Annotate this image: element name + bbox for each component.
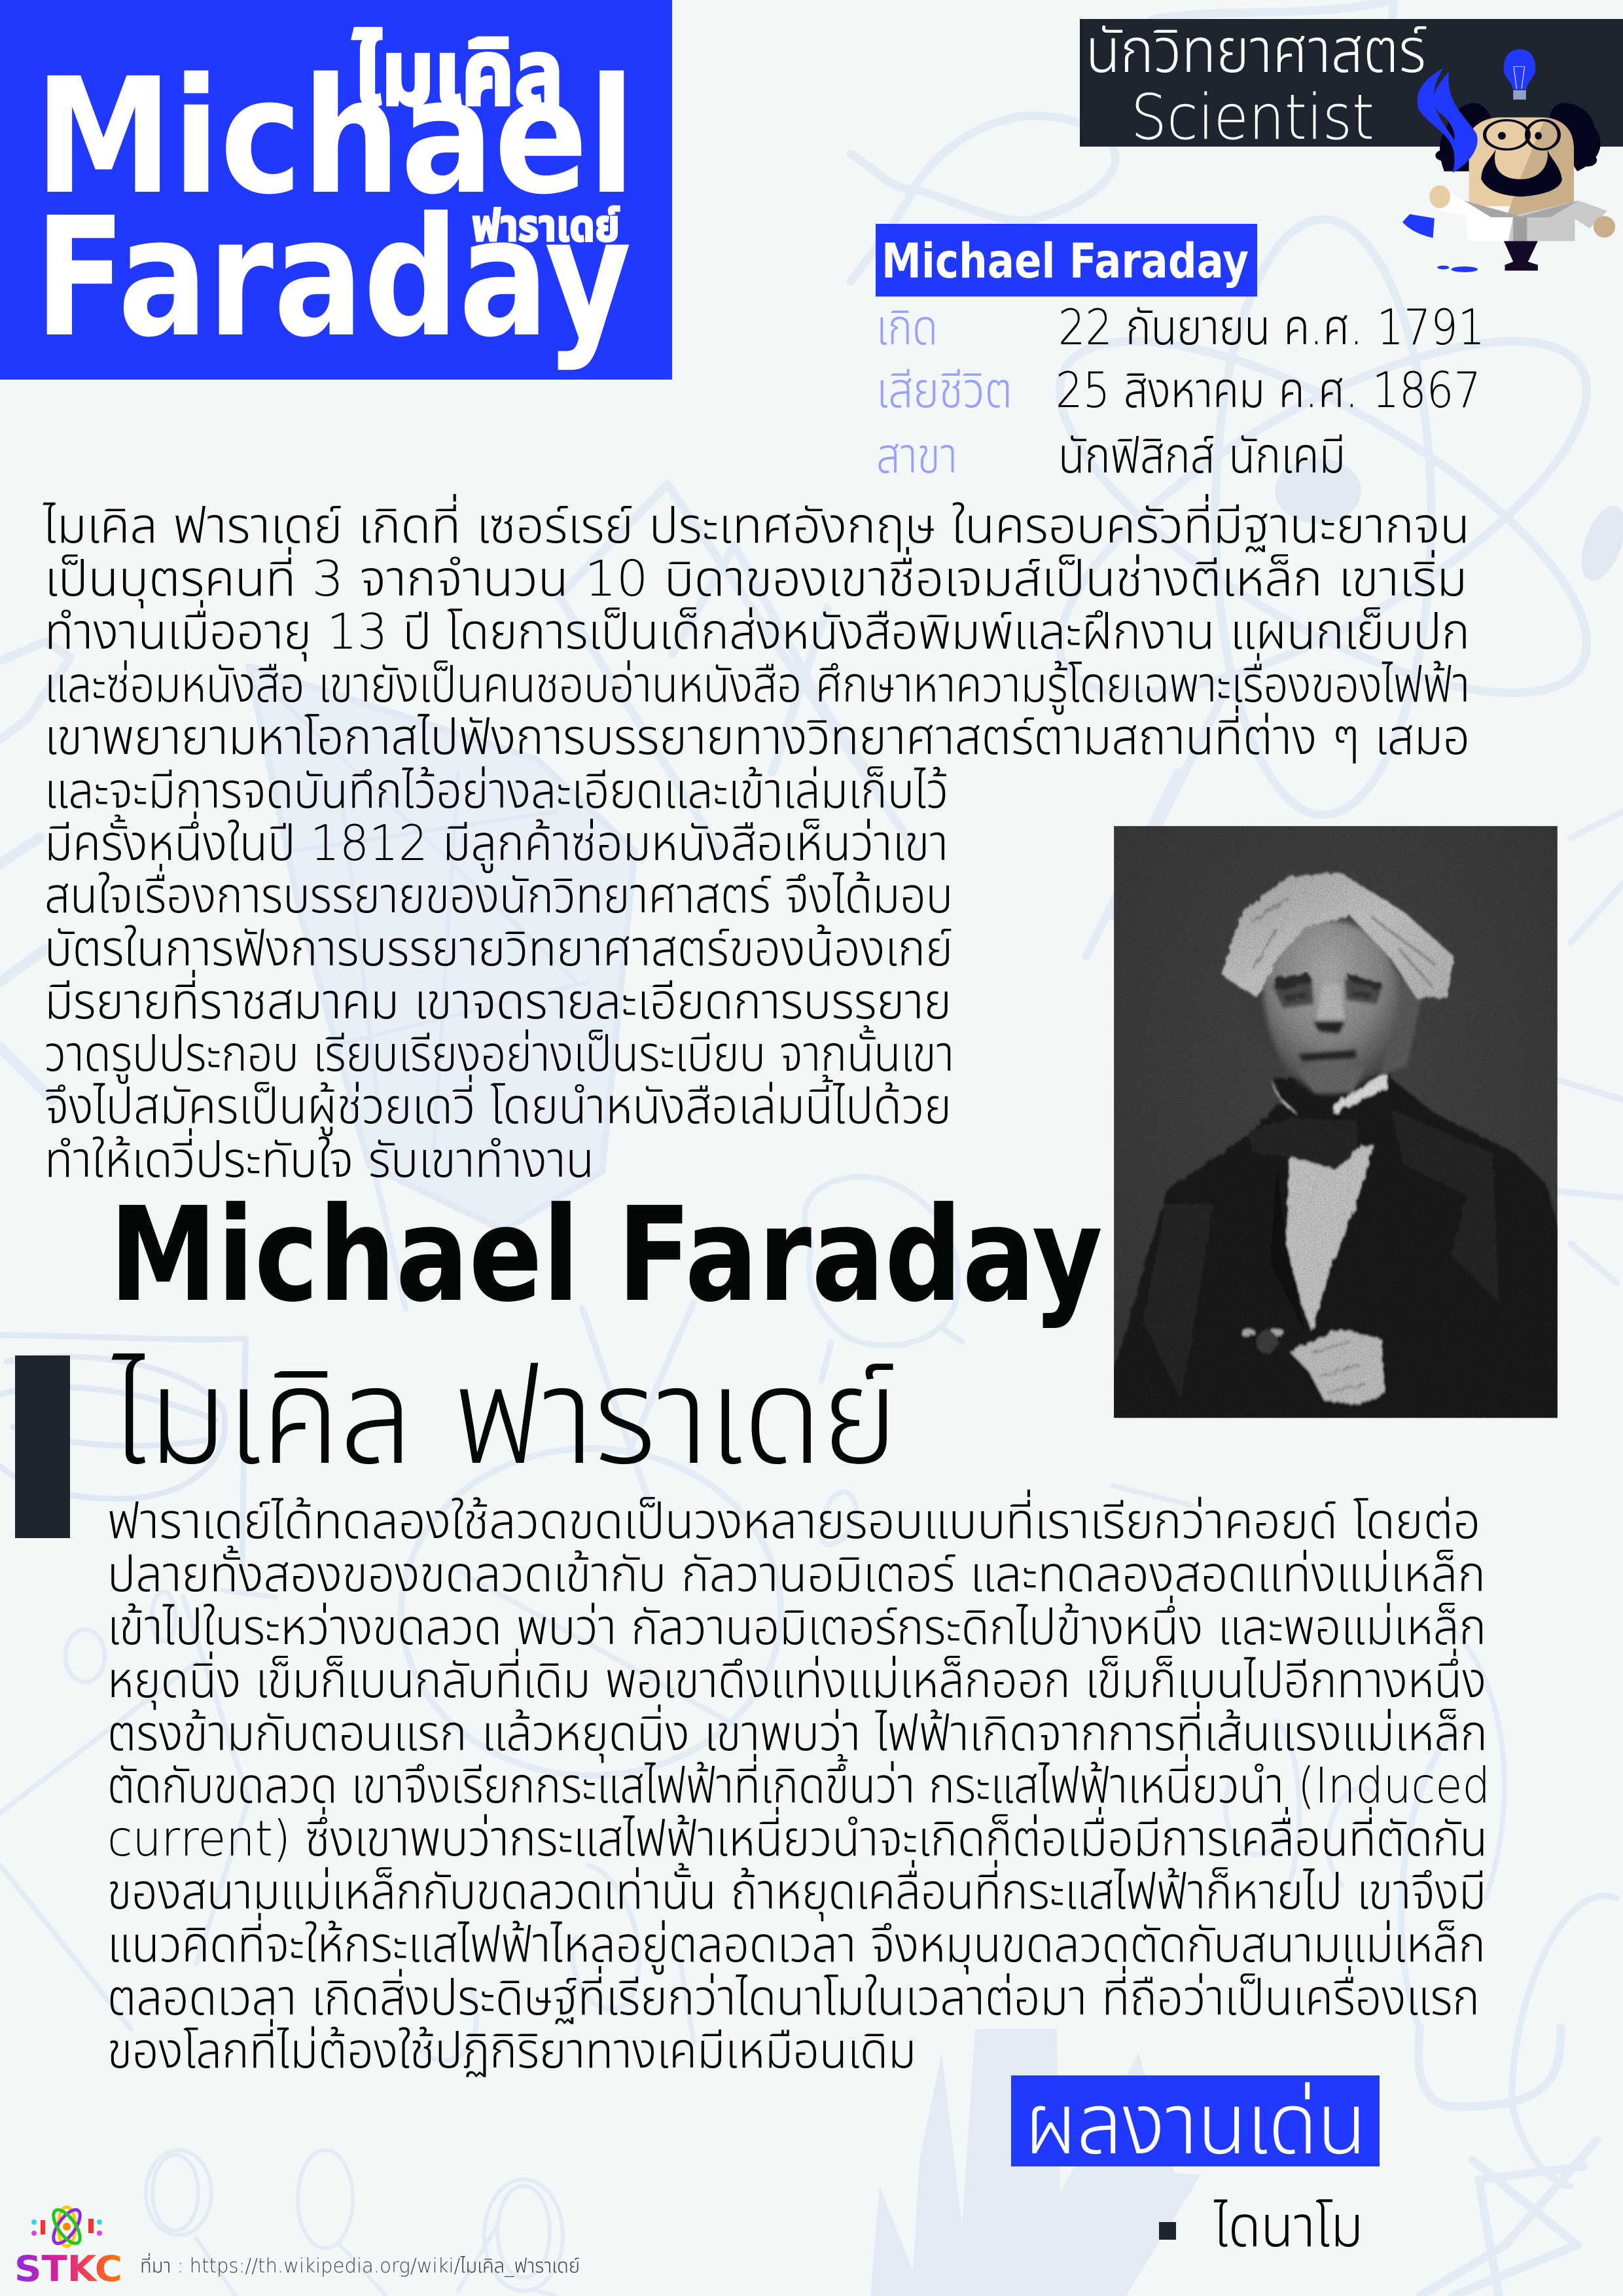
text block: induction discovery: ปลายทั้งสองของขดลวดเข้ากับ กัลวานอมิเตอร์ และทดลองสอดแท่งแม่เหล็ก (107, 1545, 1486, 1603)
portrait photo of Michael Faraday (1109, 826, 1562, 1427)
logo atom mark (31, 2206, 102, 2248)
text block: early life full width: เขาพยายามหาโอกาสไปฟังการบรรยายทางวิทยาศาสตร์ตามสถานที่ต่าง ๆ เสมอ (45, 705, 1470, 766)
hair sides (1381, 972, 1421, 1077)
puddles (1437, 266, 1449, 270)
text block: induction discovery: หยุดนิ่ง เข็มก็เบนกลับที่เดิม พอเขาดึงแท่งแม่เหล็กออก เข็มก็เบนไปอีกทางหนึ่ง (107, 1648, 1486, 1710)
English category label: Scientist (1131, 82, 1374, 154)
fact: born (876, 298, 1485, 356)
text block: early life full width: ทำงานเมื่ออายุ 13 ปี โดยการเป็นเด็กส่งหนังสือพิมพ์และฝึกงาน แผนกเย็บปก (45, 600, 1470, 662)
text block: induction discovery: ของสนามแม่เหล็กกับขดลวดเท่านั้น ถ้าหยุดเคลื่อนที่กระแสไฟฟ้าก็หายไป เขาจึงมี (107, 1859, 1486, 1922)
name tag (876, 224, 1257, 296)
text block: early life full width: เป็นบุตรคนที่ 3 จากจำนวน 10 บิดาของเขาชื่อเจมส์เป็นช่างตีเหล็ก เขาเริ่ม (45, 547, 1467, 609)
title panel (0, 0, 672, 380)
text block: early life beside portrait: และจะมีการจดบันทึกไว้อย่างละเอียดและเข้าเล่มเก็บไว้ (45, 762, 948, 819)
bullet (1159, 2222, 1176, 2240)
title: Michael: Michael (35, 44, 635, 230)
panel: notable works (1011, 2074, 1380, 2260)
accent bar (15, 1355, 70, 1538)
text block: induction discovery: ฟาราเดย์ได้ทดลองใช้ลวดขดเป็นวงหลายรอบแบบที่เราเรียกว่าคอยด์ โดยต่อ (107, 1489, 1480, 1550)
collar (1272, 1073, 1387, 1114)
heading English: Michael Faraday (109, 1179, 1103, 1331)
glasses (1485, 120, 1559, 149)
lab coat (1437, 194, 1607, 241)
text block: early life full width (43, 493, 1470, 766)
blue smoke (1418, 68, 1478, 173)
shirt (1286, 1145, 1374, 1331)
source citation: ที่มา : https://th.wikipedia.org/wiki/ไมเคิล_ฟาราเดย์ (140, 2253, 580, 2278)
spectacles in hand (1241, 1329, 1255, 1336)
text block: early life beside portrait: สนใจเรื่องการบรรยายของนักวิทยาศาสตร์ จึงได้มอบ (45, 863, 953, 924)
left hand and flask (1429, 185, 1450, 208)
text block: induction discovery: แนวคิดที่จะให้กระแสไฟฟ้าไหลอยู่ตลอดเวลา จึงหมุนขดลวดตัดกับสนามแม่เหล็ก (107, 1912, 1486, 1975)
section heading (15, 1179, 1103, 1538)
fact: field (876, 427, 1346, 484)
text block: early life beside portrait: มีรยายที่ราชสมาคม เขาจดรายละเอียดการบรรยาย (45, 969, 952, 1030)
bow tie (1248, 1118, 1357, 1170)
notable works heading: ผลงานเด่น (1025, 2074, 1366, 2174)
text block: induction discovery: ตลอดเวลา เกิดสิ่งประดิษฐ์ที่เรียกว่าไดนาโมในเวลาต่อมา ที่ถือว่าเป็นเครื่องแรก (107, 1965, 1480, 2026)
text block: early life beside portrait: บัตรในการฟังการบรรยายวิทยาศาสตร์ของน้องเกย์ (45, 920, 953, 977)
logo wordmark: STKC (14, 2248, 122, 2289)
text block: early life beside portrait: จึงไปสมัครเป็นผู้ช่วยเดวี่ โดยนำหนังสือเล่มนี้ไปด้วย (45, 1074, 952, 1136)
right hand (1594, 216, 1615, 238)
face (1262, 920, 1399, 1095)
hand (1289, 1329, 1385, 1405)
logo: STKC (14, 2206, 122, 2289)
coat (1109, 1079, 1562, 1427)
heading Thai: ไมเคิล ฟาราเดย์ (111, 1339, 898, 1495)
head (1469, 117, 1574, 206)
Thai title: Faraday: ฟาราเดย์ (472, 200, 620, 252)
text block: induction discovery (107, 1489, 1490, 2079)
facial features (1272, 978, 1383, 1093)
text block: induction discovery: ตรงข้ามกับตอนแรก แล้วหยุดนิ่ง เขาพบว่า ไฟฟ้าเกิดจากการที่เส้นแรงแม่เหล็ก (107, 1701, 1488, 1763)
text block: early life beside portrait (45, 762, 954, 1189)
fact: field: สาขา (876, 427, 957, 484)
fact: field: นักฟิสิกส์ นักเคมี (1058, 427, 1346, 484)
notable work item: ไดนาโม (1213, 2193, 1363, 2260)
category banner: scientist (1080, 16, 1623, 154)
leg and shoe (1504, 241, 1538, 270)
Thai title: Michael: ไมเคิล (353, 20, 563, 127)
fact: died (876, 361, 1481, 419)
fact: born: 22 กันยายน ค.ศ. 1791 (1058, 298, 1485, 356)
biography facts (876, 224, 1485, 484)
text block: early life beside portrait: ทำให้เดวี่ประทับใจ รับเขาทำงาน (45, 1128, 594, 1189)
Thai category label: นักวิทยาศาสตร์ (1086, 16, 1427, 87)
name tag: Michael Faraday (882, 234, 1249, 289)
text block: induction discovery: เข้าไปในระหว่างขดลวด พบว่า กัลวานอมิเตอร์กระดิกไปข้างหนึ่ง และพอแม่เหล็ก (107, 1595, 1486, 1656)
fact: died: เสียชีวิต (876, 361, 1012, 419)
text block: induction discovery: current) ซึ่งเขาพบว่ากระแสไฟฟ้าเหนี่ยวนำจะเกิดก็ต่อเมื่อมีการเคลื่อนที่ตัดกัน (107, 1806, 1488, 1867)
fact: died: 25 สิงหาคม ค.ศ. 1867 (1056, 361, 1481, 419)
text block: early life full width: ไมเคิล ฟาราเดย์ เกิดที่ เซอร์เรย์ ประเทศอังกฤษ ในครอบครัวที่มีฐานะยากจน (43, 493, 1470, 554)
text block: early life full width: และซ่อมหนังสือ เขายังเป็นคนชอบอ่านหนังสือ ศึกษาหาความรู้โดยเฉพาะเรื่องของไฟฟ้า (45, 653, 1470, 715)
neck stock (1274, 1075, 1391, 1149)
title: Faraday: Faraday (35, 183, 632, 374)
fact: born: เกิด (876, 298, 938, 356)
icon: light bulb (1504, 49, 1535, 99)
text block: induction discovery: ของโลกที่ไม่ต้องใช้ปฏิกิริยาทางเคมีเหมือนเดิม (107, 2018, 916, 2079)
text block: early life beside portrait: วาดรูปประกอบ เรียบเรียงอย่างเป็นระเบียบ จากนั้นเขา (45, 1024, 954, 1084)
text block: early life beside portrait: มีครั้งหนึ่งในปี 1812 มีลูกค้าซ่อมหนังสือเห็นว่าเขา (45, 811, 948, 873)
hair (1221, 872, 1454, 998)
text block: induction discovery: ตัดกับขดลวด เขาจึงเรียกกระแสไฟฟ้าที่เกิดขึ้นว่า กระแสไฟฟ้าเหนี่ยวนำ (Induced (107, 1753, 1490, 1814)
moustache (1481, 149, 1562, 197)
icon: cartoon scientist (1402, 49, 1615, 272)
hair (1435, 103, 1601, 171)
brows and eyes (1274, 973, 1382, 1001)
